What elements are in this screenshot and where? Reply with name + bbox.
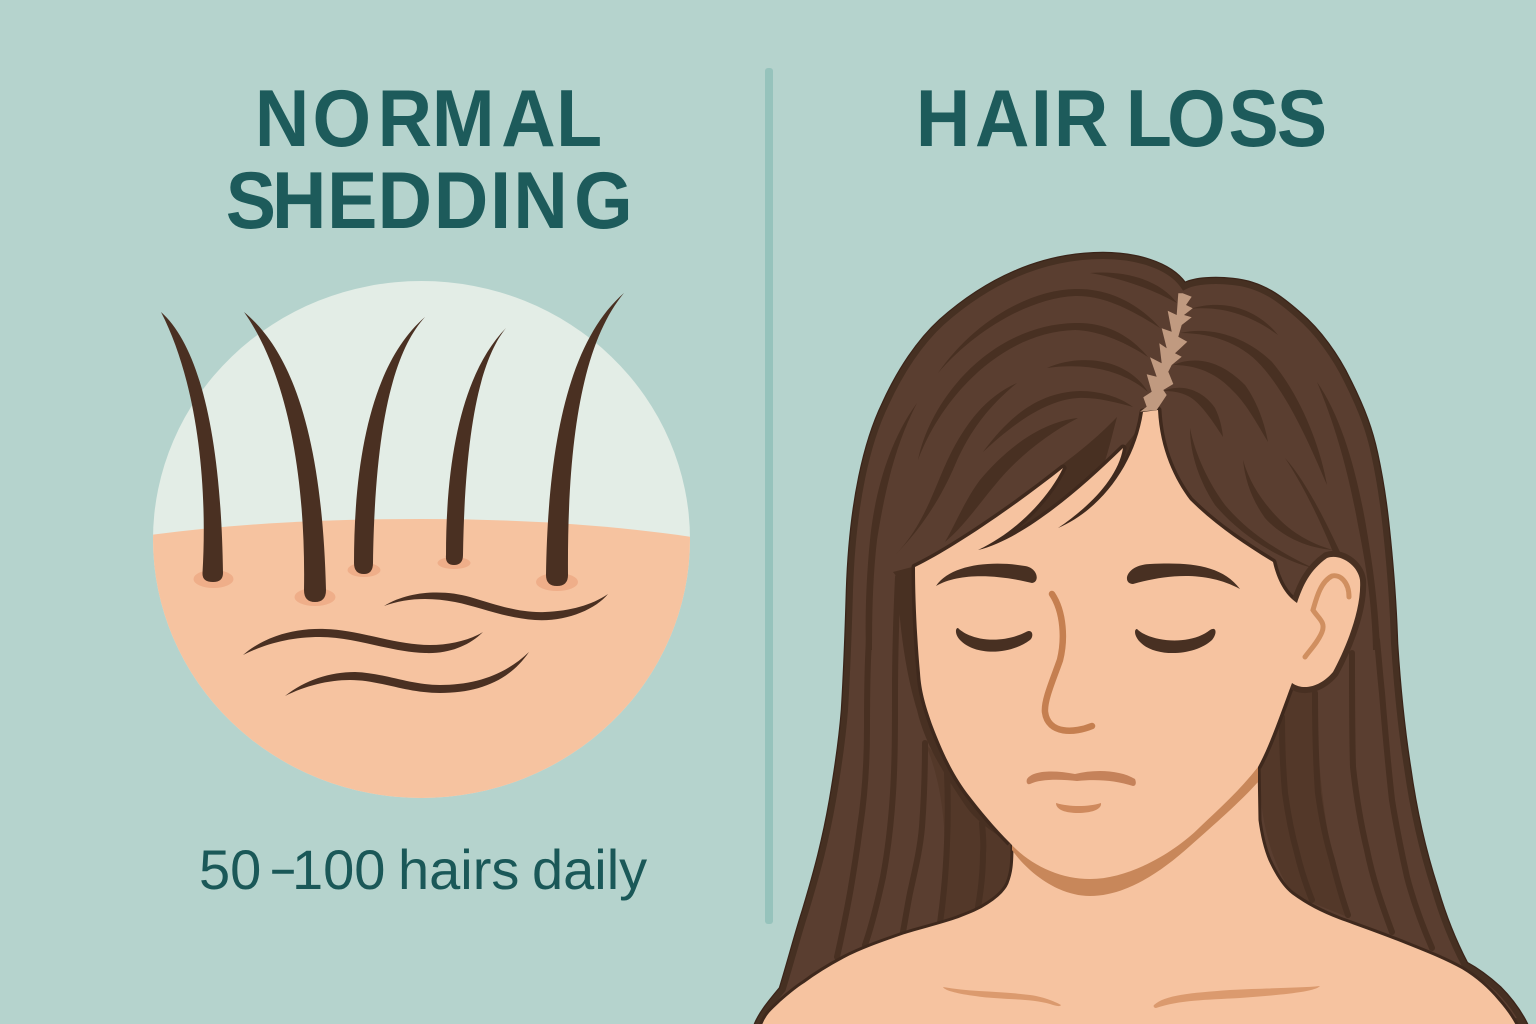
- lower hair strands: [837, 577, 1432, 957]
- lower lip: [1056, 803, 1101, 813]
- neck and shoulders: [760, 760, 1518, 1024]
- standing hairs: [161, 293, 624, 602]
- face and ear: [915, 410, 1360, 879]
- title: normal shedding: SHEDDING: [226, 154, 633, 246]
- title: normal shedding: NORMAL: [255, 72, 602, 164]
- title: hair loss: HAIR LOSS: [916, 72, 1327, 164]
- circle: sky background: [153, 281, 690, 798]
- follicles: [194, 557, 578, 606]
- hair rim: [755, 253, 1527, 1024]
- caption: 50–100 hairs daily: daily: [532, 838, 647, 901]
- eyebrows: [936, 563, 1240, 589]
- caption: 50–100 hairs daily: hairs: [398, 838, 519, 901]
- title: normal shedding: [226, 72, 633, 246]
- panel: scalp close-up: [150, 281, 692, 800]
- jaw shadow: [1012, 750, 1258, 896]
- skin section of the circle: [150, 519, 692, 800]
- illustration: woman with thinning parting: [755, 253, 1527, 1024]
- shaded hair beside the jaw: [925, 683, 1350, 925]
- fallen hairs: [243, 593, 608, 696]
- mouth: [1027, 771, 1136, 786]
- collarbones: [943, 986, 1320, 1008]
- thinning parting: [1140, 293, 1193, 412]
- nose: [1045, 594, 1092, 731]
- dark band around the ear: [1292, 557, 1360, 687]
- inner ear: [1305, 576, 1349, 657]
- caption: 50–100 hairs daily: –: [273, 848, 293, 889]
- closed eyes: [956, 628, 1216, 653]
- caption: 50–100 hairs daily: 100: [292, 838, 385, 901]
- caption: 50–100 hairs daily: 50: [199, 838, 261, 901]
- hair strands: [866, 272, 1380, 845]
- hair silhouette: [755, 253, 1527, 1024]
- hairline outline: [915, 410, 1360, 843]
